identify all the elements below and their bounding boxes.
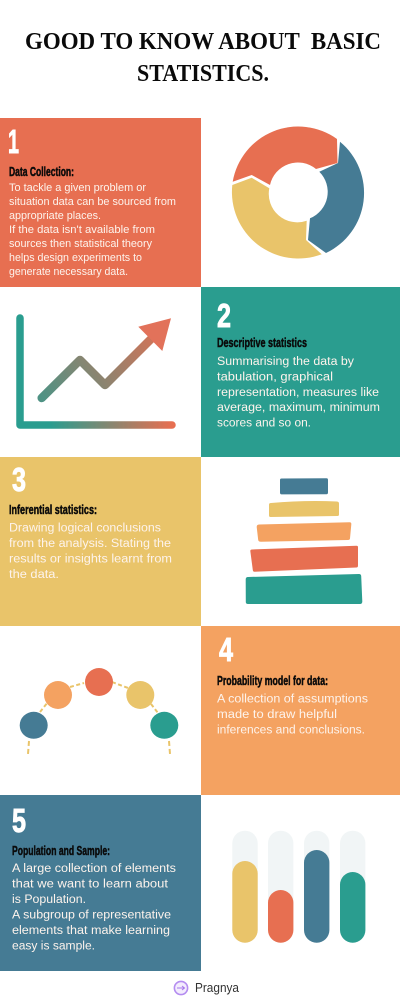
text: data collection body: sources then statistical theory — [9, 238, 152, 250]
layer: blue — [280, 478, 328, 494]
text: population and sample body: A subgroup of representative — [12, 910, 171, 922]
text: data collection body: situation data can be sourced from — [9, 196, 176, 208]
title — [25, 29, 381, 87]
panel: probability model — [201, 626, 400, 795]
number 5: 5 — [12, 802, 26, 839]
text: probability model body: made to draw helpful — [217, 709, 337, 721]
heading: inferential statistics: Inferential statistics: — [9, 503, 97, 517]
text: data collection body: If the data isn't available from — [9, 224, 155, 236]
text: data collection body: To tackle a given problem or — [9, 182, 146, 194]
bar track 4 — [340, 831, 365, 943]
donut segment: coral — [233, 127, 338, 185]
text: descriptive statistics body: average, maximum, minimum — [217, 402, 380, 414]
bar fill: teal — [340, 872, 365, 943]
text: descriptive statistics body: Summarising the data by — [217, 356, 354, 368]
arrow head — [138, 318, 171, 351]
icon: arc of connected dots — [20, 668, 178, 754]
bar track 1 — [232, 831, 258, 943]
text: population and sample body: that we want to learn about — [12, 878, 169, 890]
donut segment: blue — [308, 142, 364, 253]
text: data collection body: generate necessary data. — [9, 266, 128, 278]
number 2: 2 — [217, 297, 231, 334]
text: population and sample body — [12, 863, 176, 952]
title: STATISTICS. — [137, 61, 269, 87]
text: population and sample body: elements that make learning — [12, 925, 170, 937]
panel: inferential statistics — [0, 457, 201, 626]
text: inferential statistics body: results or insights learnt from — [9, 554, 172, 566]
text: descriptive statistics body: representation, measures like — [217, 387, 379, 399]
bar track 2 — [268, 831, 293, 943]
text: data collection body: appropriate places. — [9, 210, 101, 222]
chart axes — [20, 318, 172, 425]
brand name: Pragnya — [195, 981, 239, 995]
heading: descriptive statistics: Descriptive statistics — [217, 336, 307, 350]
layer: coral — [250, 546, 358, 572]
text: population and sample body: A large collection of elements — [12, 863, 176, 875]
panel: data collection — [0, 118, 201, 287]
dashed connectors — [28, 682, 170, 754]
text: descriptive statistics body: tabulation, graphical — [217, 372, 333, 384]
dot: teal — [150, 712, 178, 739]
heading: data collection: Data Collection: — [9, 165, 74, 179]
text: probability model body: inferences and conclusions. — [217, 724, 365, 736]
text: population and sample body: is Population. — [12, 894, 86, 906]
text: inferential statistics body: Drawing logical conclusions — [9, 523, 161, 535]
icon: Pragnya logo — [174, 981, 188, 995]
text: data collection body: helps design experiments to — [9, 252, 142, 264]
text: inferential statistics body — [9, 523, 172, 581]
chart: donut cycle — [232, 127, 364, 259]
text: population and sample body: easy is sample. — [12, 940, 95, 952]
text: inferential statistics body: from the analysis. Stating the — [9, 538, 171, 550]
chart: rounded progress bars — [232, 831, 365, 943]
donut segment: yellow — [232, 178, 322, 259]
layer: teal — [246, 574, 362, 604]
bar fill: yellow — [232, 861, 258, 943]
dot: yellow — [126, 681, 154, 709]
text: probability model body — [217, 694, 368, 736]
heading: population and sample: Population and Sample: — [12, 844, 110, 858]
layer: yellow — [269, 501, 339, 517]
footer: Pragnya logo and name — [174, 981, 239, 995]
text: probability model body: A collection of assumptions — [217, 694, 368, 706]
bar fill: blue — [304, 850, 329, 943]
panel: population and sample — [0, 795, 201, 971]
heading: probability model: Probability model for data: — [217, 674, 328, 688]
number 1: 1 — [8, 123, 19, 160]
number 3: 3 — [12, 461, 26, 498]
bar fill: coral — [268, 890, 293, 943]
panel: descriptive statistics — [201, 287, 400, 457]
text: inferential statistics body: the data. — [9, 569, 59, 581]
icon: stacked layers pyramid — [246, 478, 362, 604]
layer: orange — [257, 522, 351, 542]
text: descriptive statistics body: scores and so on. — [217, 418, 311, 430]
rising line — [42, 333, 157, 398]
number 4: 4 — [219, 631, 233, 668]
dot: coral — [85, 668, 113, 696]
bar track 3 — [304, 831, 329, 943]
text: descriptive statistics body — [217, 356, 380, 430]
title: GOOD TO KNOW ABOUT BASIC — [25, 29, 381, 55]
dot: blue — [20, 712, 48, 739]
icon: line chart with rising arrow — [20, 318, 172, 425]
dot: orange — [44, 681, 72, 709]
text: data collection body — [9, 182, 176, 278]
